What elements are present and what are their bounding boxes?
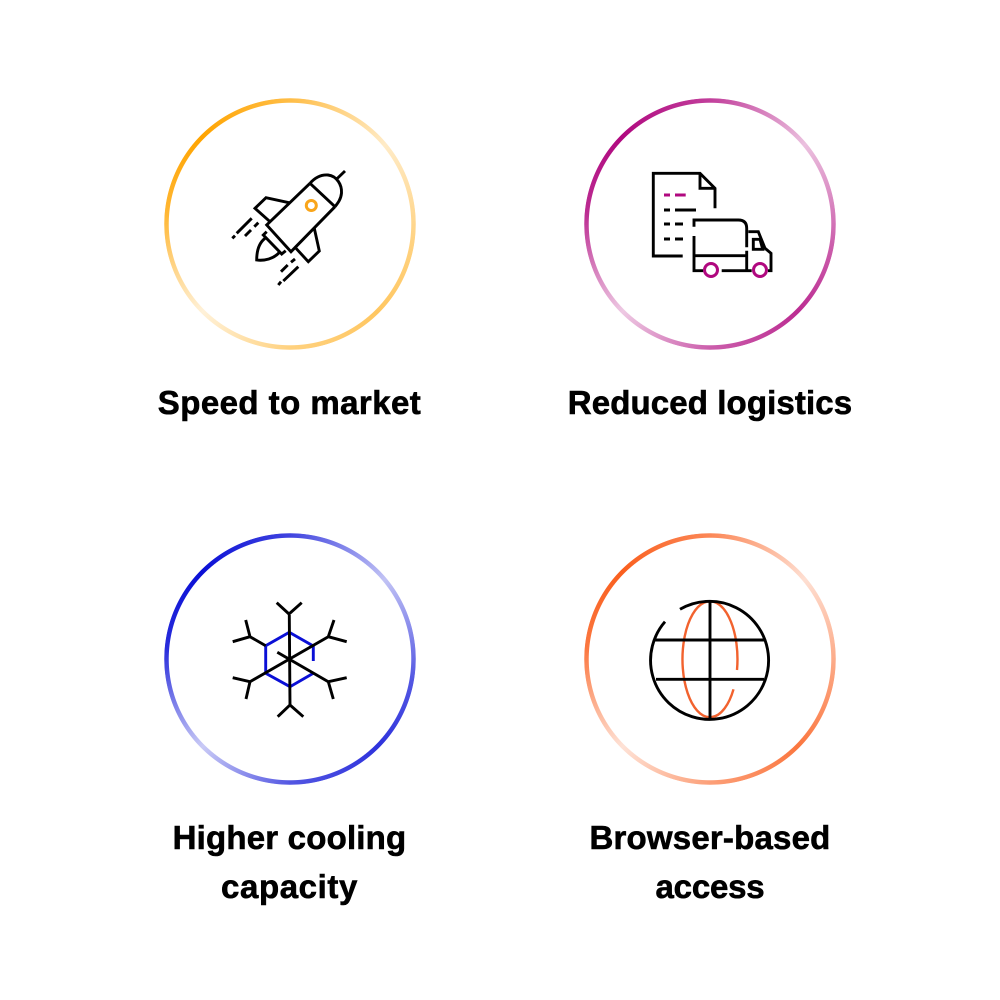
label: browser-based access bbox=[589, 819, 830, 905]
ring: higher cooling capacity bbox=[164, 533, 416, 785]
ring: reduced logistics bbox=[584, 98, 836, 350]
label: higher cooling capacity bbox=[173, 819, 406, 906]
label: browser-based access: access bbox=[656, 868, 764, 905]
label: higher cooling capacity: Higher cooling bbox=[173, 819, 406, 856]
icon: document and truck bbox=[653, 173, 771, 276]
icon: rocket bbox=[232, 171, 345, 285]
label: higher cooling capacity: capacity bbox=[221, 868, 358, 905]
ring: browser-based access bbox=[584, 533, 836, 785]
icon: snowflake bbox=[233, 603, 347, 717]
ring: speed to market bbox=[164, 98, 416, 350]
label: speed to market: Speed to market bbox=[158, 384, 421, 421]
label: reduced logistics: Reduced logistics bbox=[568, 384, 852, 421]
icon: globe bbox=[651, 601, 769, 719]
label: browser-based access: Browser-based bbox=[589, 819, 830, 856]
